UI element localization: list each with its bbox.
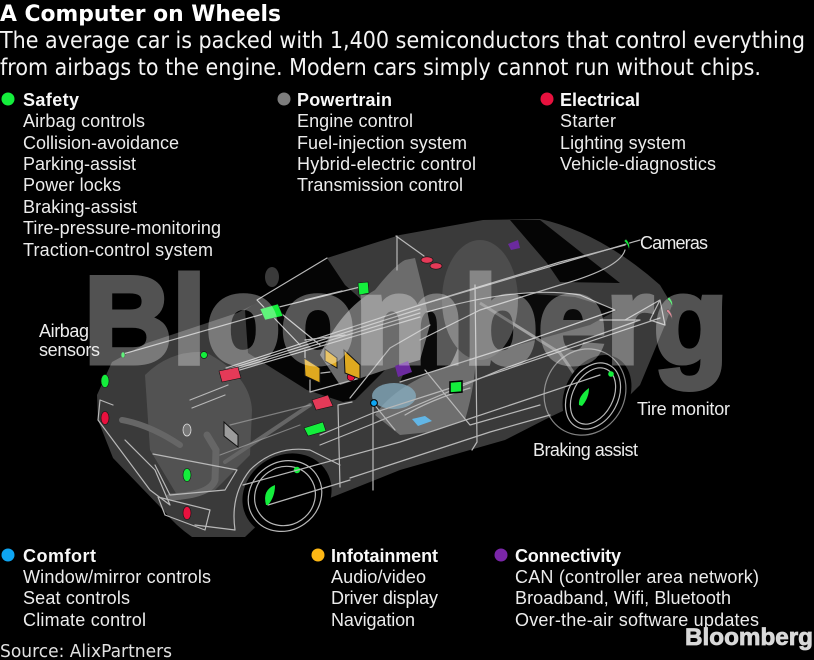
mirror: [265, 267, 279, 287]
legend: comfort: Window/mirror controls: [23, 567, 211, 587]
legend: comfort: Climate control: [23, 610, 146, 630]
legend: comfort: Seat controls: [23, 588, 130, 608]
bloomberg logo: Bloomberg: [685, 624, 813, 651]
legend: infotainment: Driver display: [331, 588, 438, 608]
wheels: [227, 334, 645, 553]
chips: electrical: [101, 257, 672, 520]
subtitle: [0, 28, 805, 81]
rear axle: [480, 303, 590, 397]
legend: safety: Power locks: [23, 175, 121, 195]
legend: connectivity: Connectivity: [515, 546, 621, 566]
legend: comfort: [2, 546, 211, 630]
legend: safety: [2, 90, 221, 260]
title: A Computer on Wheels: [0, 2, 281, 27]
legend: powertrain: Hybrid-electric control: [297, 154, 476, 174]
callouts: [39, 233, 730, 460]
callouts: sensors: [39, 340, 100, 360]
legend: safety: Collision-avoidance: [23, 133, 179, 153]
legend: infotainment: [312, 546, 438, 630]
legend: powertrain: [278, 90, 476, 195]
legend: safety: Parking-assist: [23, 154, 136, 174]
rear window: [510, 220, 620, 283]
legend: safety: Braking-assist: [23, 197, 137, 217]
legend: powertrain: Engine control: [297, 111, 413, 131]
car illustration: [97, 219, 673, 553]
legend: connectivity: CAN (controller area network): [515, 567, 759, 587]
legend: safety: Traction-control system: [23, 240, 213, 260]
legend: comfort: Comfort: [23, 546, 96, 566]
legend: electrical: Lighting system: [560, 133, 686, 153]
legend: safety: Airbag controls: [23, 111, 145, 131]
callouts: Tire monitor: [637, 399, 730, 419]
side window: [400, 293, 617, 382]
chips: infotainment: [304, 349, 360, 383]
engine bay ghost: [145, 352, 252, 500]
wiring: [98, 236, 665, 530]
cabin ghost: [375, 300, 476, 435]
front seats: [320, 258, 430, 385]
legend: safety: Safety: [23, 90, 79, 110]
chips: powertrain: [183, 422, 238, 447]
front wheel: [227, 437, 350, 553]
legend: connectivity: Broadband, Wifi, Bluetooth: [515, 588, 731, 608]
chips: connectivity: [395, 240, 520, 377]
blue steering area: [372, 383, 416, 409]
legend: electrical: Vehicle-diagnostics: [560, 154, 716, 174]
callouts: Braking assist: [533, 440, 638, 460]
watermark: Bloomberg: [84, 252, 728, 390]
legend: electrical: Electrical: [560, 90, 640, 110]
rear seat ghost: [442, 240, 518, 360]
windshield: [245, 258, 430, 402]
legend: connectivity: Over-the-air software updates: [515, 610, 759, 630]
chips: comfort: [371, 400, 432, 426]
legend: electrical: [540, 90, 716, 174]
engine tubes: [122, 405, 310, 497]
car body: [97, 219, 672, 537]
legend: safety: Tire-pressure-monitoring: [23, 218, 221, 238]
chips: safety: [101, 239, 673, 482]
legend: connectivity: [494, 546, 759, 630]
legend: infotainment: Navigation: [331, 610, 415, 630]
callouts: Airbag: [39, 321, 89, 341]
legend: powertrain: Transmission control: [297, 175, 463, 195]
legend: powertrain: Powertrain: [297, 90, 392, 110]
legend: electrical: Starter: [560, 111, 616, 131]
legend: infotainment: Audio/video: [331, 567, 426, 587]
legend: infotainment: Infotainment: [331, 546, 438, 566]
rear wheel: [529, 334, 645, 450]
callouts: Cameras: [640, 233, 708, 253]
legend: powertrain: Fuel-injection system: [297, 133, 467, 153]
